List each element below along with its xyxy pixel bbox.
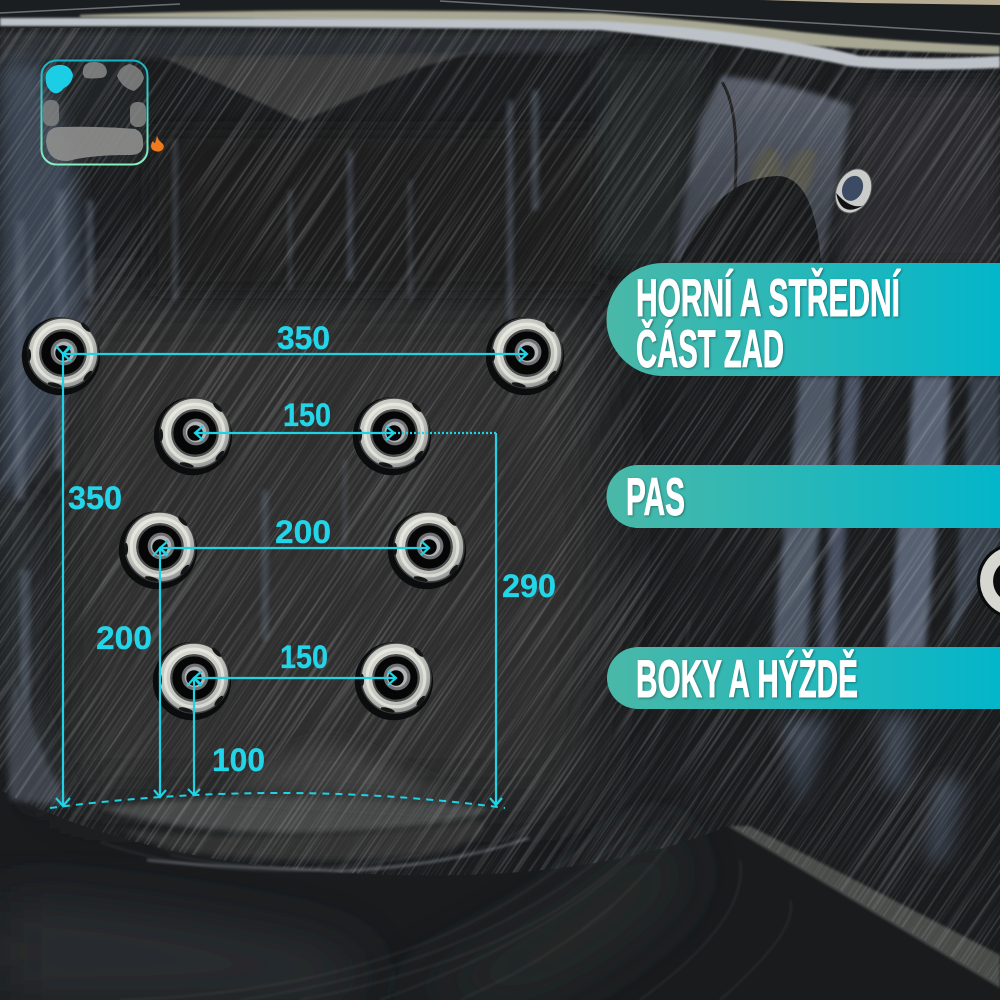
ledge strip lower right bbox=[728, 826, 1000, 988]
banner: waist bbox=[606, 465, 1000, 528]
top rim bright line bbox=[0, 18, 1000, 70]
jet: second row right bbox=[353, 397, 431, 475]
mirror pole bbox=[722, 82, 736, 190]
dimension lines and arrows bbox=[50, 346, 527, 808]
reflections: lower right splotches bbox=[780, 715, 965, 860]
dimension: 200 vertical bbox=[153, 548, 167, 797]
label: 150 upper: 150 bbox=[283, 397, 331, 433]
shell: band under rim bbox=[0, 32, 620, 60]
shell: lower left reflection bbox=[0, 502, 60, 808]
seat mound bbox=[233, 747, 452, 802]
jet: fourth row right bbox=[355, 642, 433, 720]
seat edge dashed curve bbox=[50, 793, 505, 808]
shell: right upper wall bbox=[835, 85, 1000, 265]
label: 100 vertical: 100 bbox=[212, 742, 265, 778]
seat highlighted in cyan bbox=[46, 65, 73, 93]
heading: waist: PAS bbox=[626, 468, 685, 527]
shell: left of mirror bbox=[600, 50, 705, 265]
shell: upper left fold bbox=[158, 50, 482, 122]
icon: flame bbox=[151, 136, 164, 152]
label: 200 vertical: 200 bbox=[96, 620, 152, 656]
seat bottom lip bbox=[100, 796, 490, 834]
shell: seat body bbox=[60, 300, 610, 800]
dimension: 290 vertical bbox=[490, 433, 502, 805]
banner: hips and buttocks bbox=[607, 647, 1000, 709]
reflections: vertical drips on seat bbox=[20, 90, 535, 720]
seat: top right bbox=[117, 64, 144, 91]
jet: second row left bbox=[154, 397, 232, 475]
seat lip lower shading bbox=[120, 820, 484, 860]
seat: lounger bbox=[46, 127, 143, 161]
footwell haze bbox=[0, 900, 367, 1000]
label: 350 horizontal: 350 bbox=[277, 320, 330, 356]
reflections: blue stripes right bbox=[772, 376, 838, 650]
dimension: guide to 290 bbox=[394, 432, 497, 434]
jet: fourth row left bbox=[153, 642, 231, 720]
jet: right edge partial bbox=[977, 546, 1000, 616]
top thin lines bbox=[0, 1, 1000, 34]
dimension: 350 vertical bbox=[56, 346, 70, 806]
heading line 2: ČÁST ZAD bbox=[636, 318, 784, 379]
seat: left side bbox=[43, 100, 59, 126]
blue-grey mirror reflection bbox=[672, 76, 852, 262]
footwell curves bbox=[100, 620, 791, 1000]
lower left corner reflection bbox=[8, 680, 70, 805]
label: 150 lower: 150 bbox=[280, 639, 328, 675]
dimension: 150 fourth row bbox=[194, 671, 396, 685]
jet: third row right bbox=[388, 511, 466, 589]
dimension: 150 second row bbox=[195, 426, 394, 440]
top rim beige bbox=[80, 10, 1000, 54]
banner: upper and middle back bbox=[606, 263, 1000, 379]
seat: top middle bbox=[83, 62, 107, 78]
jet: third row left bbox=[119, 511, 197, 589]
shell: upper left reflection bbox=[0, 60, 85, 500]
label: 200 horizontal: 200 bbox=[275, 514, 331, 550]
top corner beige bbox=[760, 0, 1000, 5]
jet: top right bbox=[486, 317, 564, 395]
black arch bbox=[680, 176, 821, 262]
small chrome button bbox=[828, 163, 879, 219]
dimension: 200 third row bbox=[160, 541, 429, 555]
dimension: 350 top horizontal bbox=[63, 347, 527, 361]
jet: top left bbox=[22, 317, 100, 395]
shell: upper seat dark bbox=[150, 284, 158, 290]
dimension: 100 vertical bbox=[187, 678, 201, 795]
top rim dark bbox=[777, 28, 1000, 56]
seat: right side bbox=[130, 102, 146, 127]
minimap seat icon bbox=[42, 60, 164, 164]
label: 350 vertical: 350 bbox=[68, 480, 122, 516]
label: 290 vertical: 290 bbox=[502, 568, 556, 604]
tree reflection in mirror bbox=[749, 148, 814, 194]
